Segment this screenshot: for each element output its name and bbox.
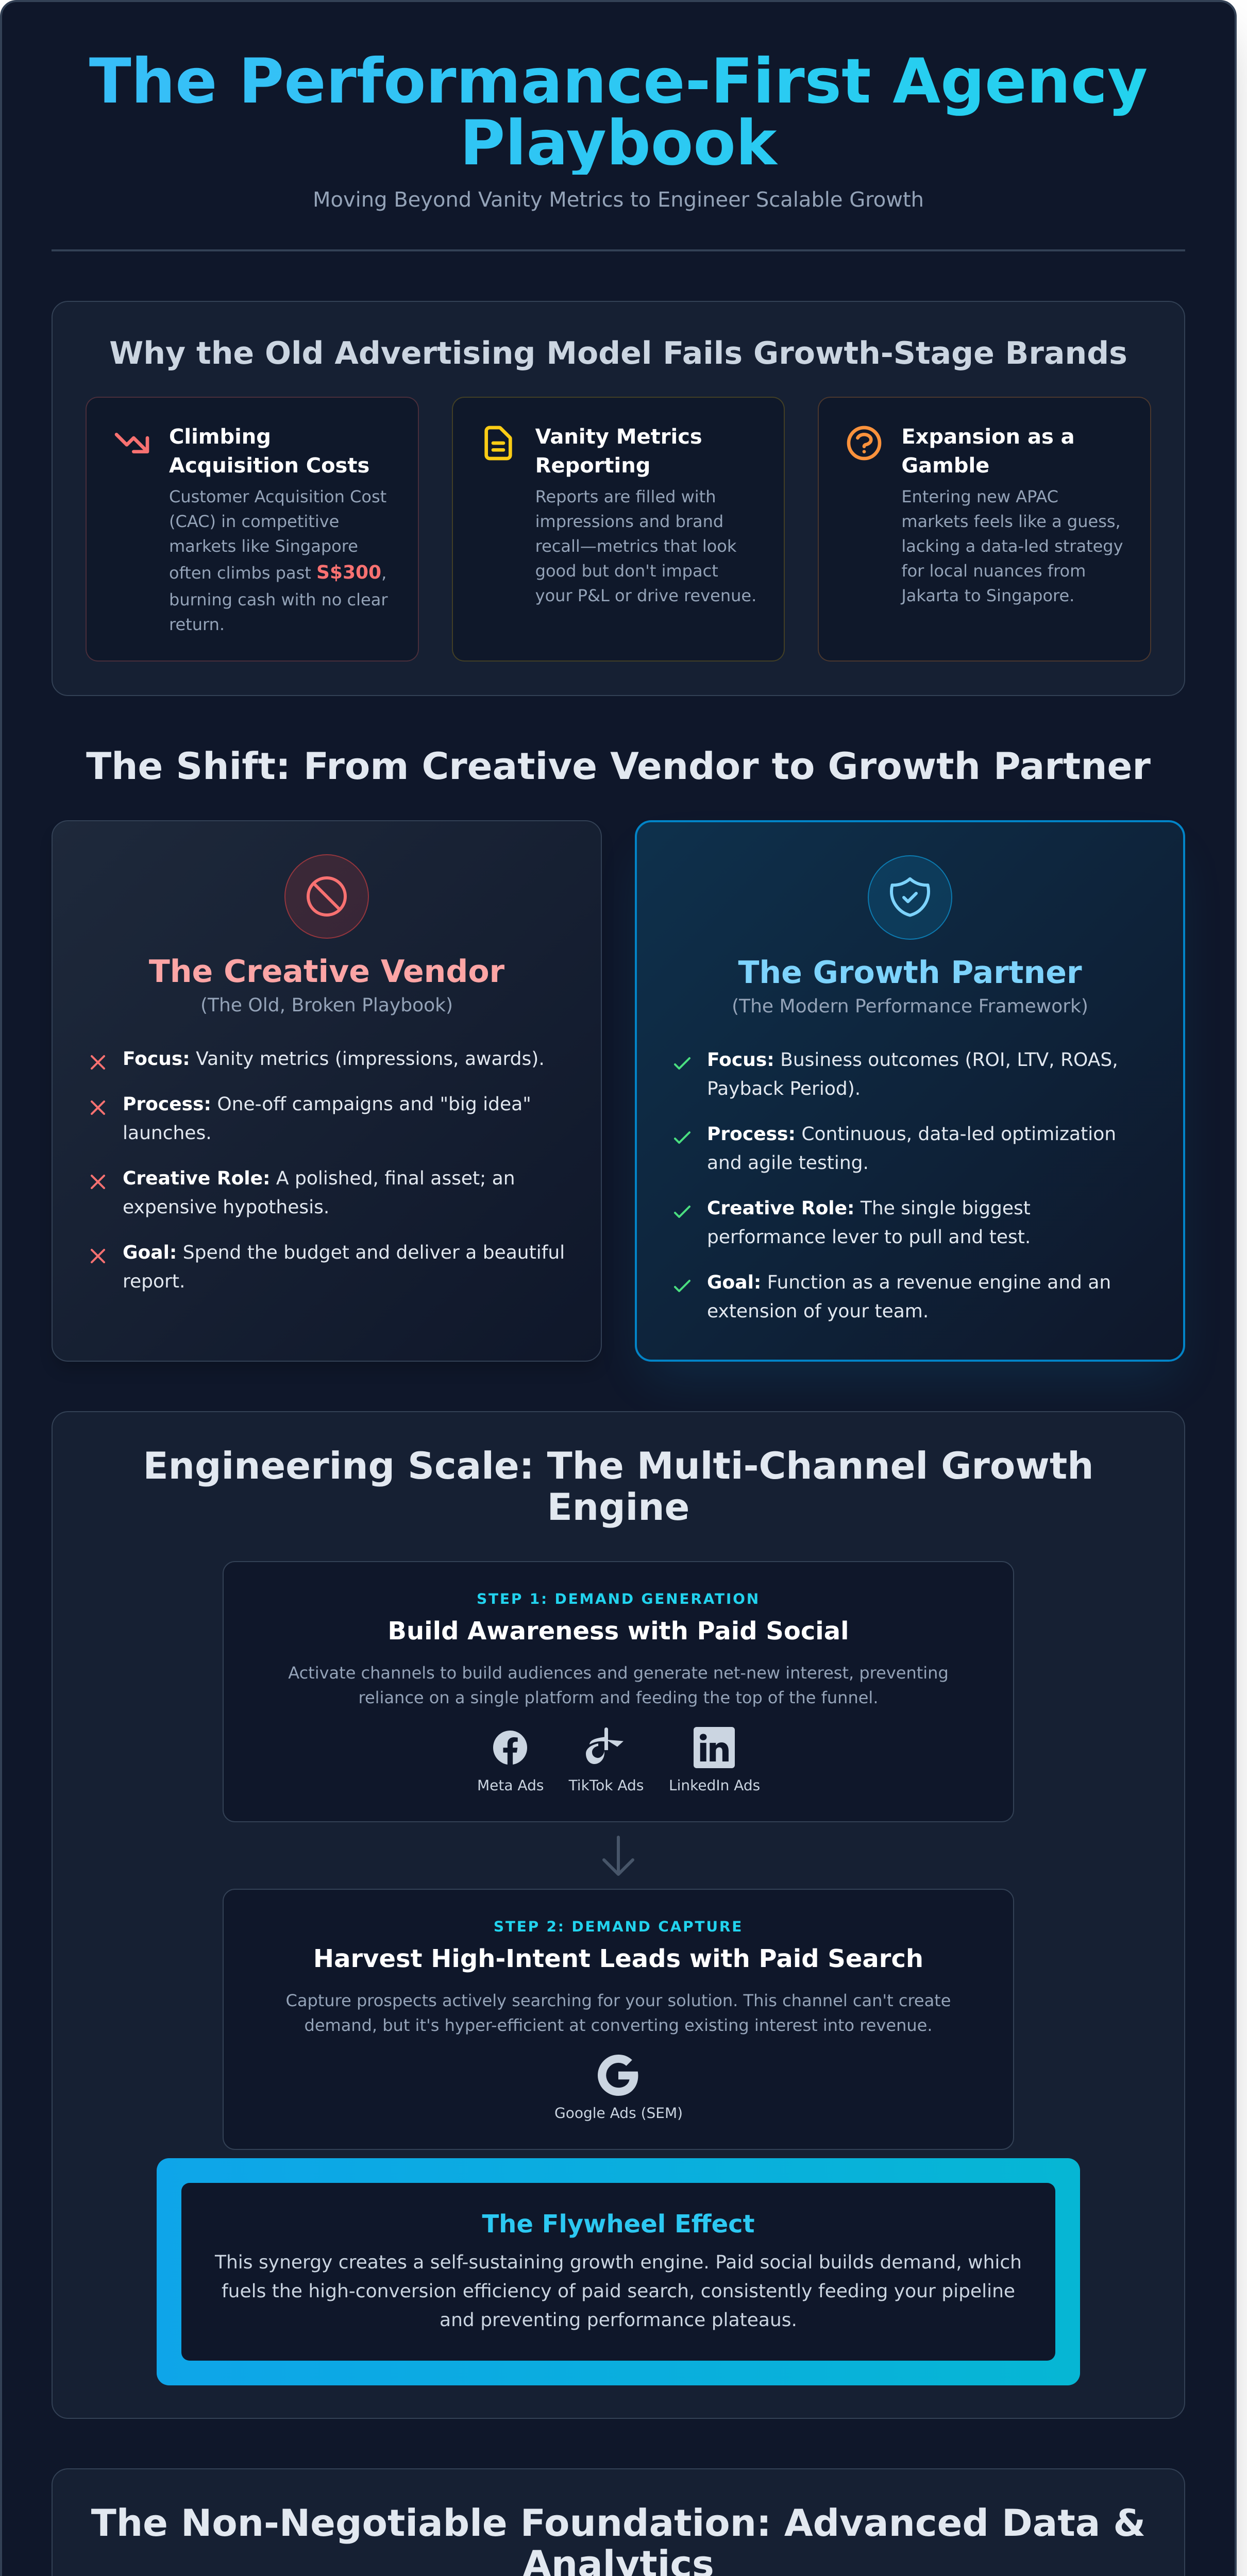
panel: multi-channel growth engine (52, 1411, 1185, 2419)
callout title: The Flywheel Effect (482, 2210, 755, 2239)
icon: x (91, 1249, 105, 1263)
item text: performance lever to pull and test. (707, 1227, 1031, 1248)
card text: Customer Acquisition Cost (169, 487, 386, 506)
item text: report. (123, 1271, 185, 1292)
item: creative role (91, 1168, 515, 1218)
step description: reliance on a single platform and feeding the top of the funnel. (359, 1688, 878, 1707)
card text: recall—metrics that look (535, 536, 736, 556)
heading: non-negotiable foundation (52, 2502, 1185, 2576)
panel: the growth partner (635, 820, 1185, 1362)
step title: Build Awareness with Paid Social (387, 1617, 849, 1646)
icon: tiktok ads (568, 1727, 644, 1796)
google glyph (598, 2055, 639, 2096)
card text: (CAC) in competitive (169, 512, 339, 531)
heading: why the old model fails: Why the Old Advertising Model Fails Growth-Stage Brands (109, 335, 1127, 371)
step description (224, 1660, 1013, 1710)
card text: Entering new APAC (901, 487, 1058, 506)
label: LinkedIn Ads (669, 1777, 760, 1794)
item: focus (91, 1048, 545, 1070)
icon: x (91, 1055, 105, 1070)
heading: engineering scale: Engineering Scale: The Multi-Channel Growth (143, 1444, 1093, 1487)
step description (224, 1988, 1013, 2038)
heading: engineering scale (52, 1445, 1185, 1528)
card text: good but don't impact (535, 561, 718, 581)
title: Playbook (460, 107, 777, 179)
card title: Gamble (901, 454, 989, 478)
callout text: This synergy creates a self-sustaining growth engine. Paid social builds demand, which (215, 2252, 1022, 2273)
step description: demand, but it's hyper-efficient at converting existing interest into revenue. (305, 2015, 932, 2035)
panel subtitle: (The Old, Broken Playbook) (200, 995, 453, 1016)
icon: meta ads (477, 1727, 543, 1796)
item text: Goal: Function as a revenue engine and an (707, 1272, 1111, 1293)
item: process (670, 1120, 1150, 1178)
step label: STEP 1: DEMAND GENERATION (477, 1590, 760, 1607)
heading: non-negotiable foundation: The Non-Negotiable Foundation: Advanced Data & (91, 2501, 1145, 2545)
arrow: step 1 to step 2 (594, 1831, 643, 1880)
icon: check (670, 1199, 695, 1224)
tiktok glyph (568, 1727, 644, 1768)
card: vanity metrics reporting (452, 397, 785, 662)
icon: linkedin ads (669, 1727, 760, 1796)
panel title: The Growth Partner (738, 955, 1082, 991)
heading: engineering scale: Engine (547, 1485, 689, 1529)
label: Meta Ads (477, 1777, 544, 1794)
card text: burning cash with no clear (169, 590, 387, 609)
panel title: The Creative Vendor (149, 954, 504, 990)
callout text (181, 2248, 1055, 2335)
step 1 card (223, 1561, 1014, 1822)
callout text: fuels the high-conversion efficiency of paid search, consistently feeding your pipeline (222, 2281, 1015, 2302)
icon: question mark (847, 426, 881, 461)
icon: document (484, 426, 512, 461)
item text (707, 1120, 1116, 1178)
item text (707, 1046, 1118, 1104)
title: The Performance-First Agency (89, 45, 1148, 117)
card text (901, 487, 1123, 605)
step description: Capture prospects actively searching for your solution. This channel can't create (286, 1991, 951, 2010)
item: goal (91, 1242, 565, 1292)
item text (123, 1168, 515, 1218)
card text: Jakarta to Singapore. (901, 586, 1074, 605)
panel subtitle: (The Modern Performance Framework) (732, 996, 1088, 1017)
callout: flywheel effect (157, 2158, 1080, 2385)
item text: and agile testing. (707, 1153, 869, 1174)
heading: the shift: The Shift: From Creative Vendor to Growth Partner (86, 744, 1151, 788)
icon: check (670, 1274, 695, 1298)
card: expansion as a gamble (818, 397, 1151, 662)
card text: markets like Singapore (169, 536, 358, 556)
step 2 card (223, 1889, 1014, 2150)
step description: Activate channels to build audiences and generate net-new interest, preventing (288, 1663, 949, 1683)
label: Google Ads (SEM) (554, 2105, 683, 2122)
card text: impressions and brand (535, 512, 723, 531)
card title: Climbing (169, 425, 271, 449)
item text (123, 1094, 531, 1144)
card text: Reports are filled with (535, 487, 716, 506)
panel: the creative vendor (52, 820, 602, 1362)
icon: trending down (114, 433, 149, 453)
panel: why the old model fails (52, 301, 1185, 696)
card title: Reporting (535, 454, 650, 478)
icon: ban circle (284, 854, 369, 939)
item text (707, 1194, 1031, 1252)
item text: Process: One-off campaigns and "big idea" (123, 1094, 531, 1115)
icon: google ads (554, 2055, 682, 2124)
card title (901, 425, 1075, 478)
title (52, 50, 1185, 174)
step label: STEP 2: DEMAND CAPTURE (494, 1918, 743, 1935)
icon: x (91, 1175, 105, 1189)
card: climbing acquisition costs (86, 397, 419, 662)
card title (535, 425, 702, 478)
icon: check (670, 1125, 695, 1150)
item: process (91, 1094, 531, 1144)
linkedin glyph (694, 1727, 735, 1768)
callout inner panel (181, 2183, 1055, 2361)
item text: extension of your team. (707, 1301, 929, 1322)
item text: Creative Role: The single biggest (707, 1198, 1031, 1219)
item text (707, 1268, 1111, 1326)
card title: Vanity Metrics (535, 425, 702, 449)
facebook glyph (493, 1731, 527, 1765)
card text (169, 487, 387, 634)
item text: launches. (123, 1123, 212, 1144)
icon: shield check (868, 855, 952, 940)
item: creative role (670, 1194, 1150, 1252)
card text: markets feels like a guess, (901, 512, 1121, 531)
subtitle: Moving Beyond Vanity Metrics to Engineer Scalable Growth (313, 188, 924, 212)
item: focus (674, 1049, 1118, 1099)
icon: x (91, 1100, 105, 1115)
item text: Focus: Business outcomes (ROI, LTV, ROAS, (707, 1049, 1118, 1071)
item: goal (670, 1268, 1150, 1326)
item text: Creative Role: A polished, final asset; an (123, 1168, 515, 1189)
card text (535, 487, 756, 605)
step title: Harvest High-Intent Leads with Paid Search (313, 1944, 923, 1973)
item text: expensive hypothesis. (123, 1197, 329, 1218)
card text: often climbs past S$300, (169, 562, 386, 583)
card text: your P&L or drive revenue. (535, 586, 756, 605)
card title: Acquisition Costs (169, 454, 369, 478)
item text: Focus: Vanity metrics (impressions, awards). (123, 1048, 545, 1070)
card text: return. (169, 615, 225, 634)
card title: Expansion as a (901, 425, 1075, 449)
card text: for local nuances from (901, 561, 1086, 581)
card title (169, 425, 369, 478)
item text: Goal: Spend the budget and deliver a beautiful (123, 1242, 565, 1263)
callout text: and preventing performance plateaus. (440, 2310, 797, 2331)
panel: data foundation (52, 2468, 1185, 2576)
item text: Payback Period). (707, 1078, 861, 1099)
item text: Process: Continuous, data-led optimization (707, 1124, 1116, 1145)
icon: check (670, 1051, 695, 1076)
label: TikTok Ads (569, 1777, 644, 1794)
item text (123, 1242, 565, 1292)
card text: lacking a data-led strategy (901, 536, 1123, 556)
